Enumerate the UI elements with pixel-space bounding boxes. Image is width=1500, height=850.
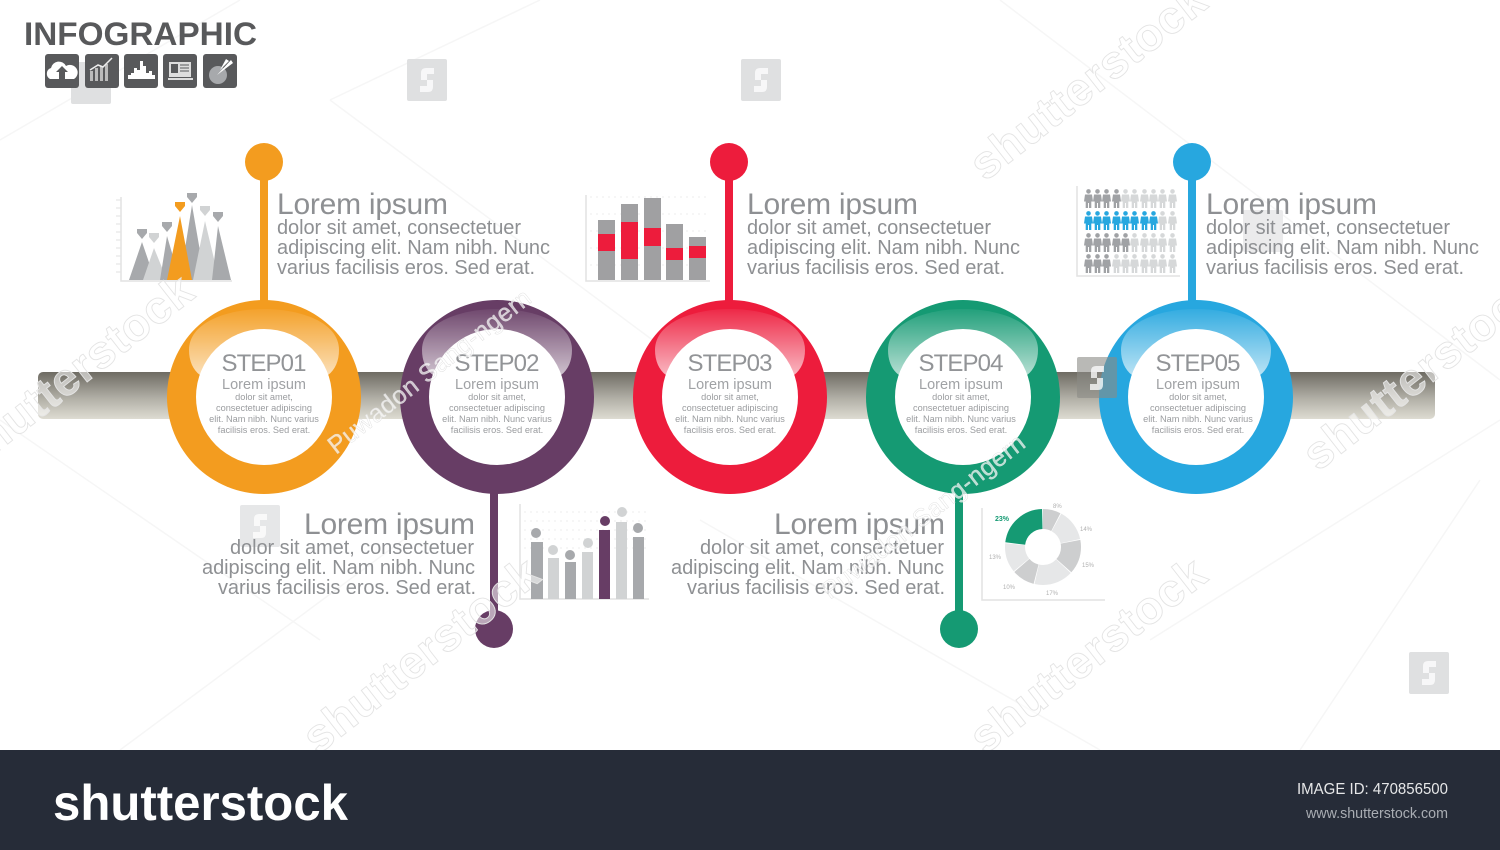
text block: step 5: varius facilisis eros. Sed erat. [1206,257,1464,279]
title: INFOGRAPHIC [24,16,257,52]
step 1 circle: STEP01 [222,350,306,377]
footer bar [0,750,1500,850]
text block: step 5: Lorem ipsum [1206,188,1377,221]
text block: step 2: Lorem ipsum [304,508,475,541]
step 5 pin [1173,143,1211,305]
text block: step 1: adipiscing elit. Nam nibh. Nunc [277,237,550,259]
step 4 circle: facilisis eros. Sed erat. [915,425,1007,435]
step 1 circle: dolor sit amet, [235,392,293,402]
chart: donut: 10% [1003,585,1016,591]
watermark text: Puwadon Sang-ngern [322,284,537,460]
step 1 circle: Lorem ipsum [222,377,306,393]
step 5 circle: elit. Nam nibh. Nunc varius [1143,414,1253,424]
watermark text: Puwadon Sang-ngern [816,429,1031,605]
timeline bar [38,372,1435,419]
text block: step 1: dolor sit amet, consectetuer [277,217,521,239]
chart: donut: 13% [989,555,1002,561]
text block: step 3: varius facilisis eros. Sed erat. [747,257,1005,279]
text block: step 3: adipiscing elit. Nam nibh. Nunc [747,237,1020,259]
step 3 circle: dolor sit amet, [701,392,759,402]
text block: step 5: adipiscing elit. Nam nibh. Nunc [1206,237,1479,259]
icon: equalizer bars [124,54,158,88]
step 1 pin [245,143,283,305]
text block: step 5: dolor sit amet, consectetuer [1206,217,1450,239]
chart: donut [982,504,1105,600]
step 4 circle [866,300,1060,494]
text block: step 4 [671,508,945,599]
step 3 circle: STEP03 [688,350,772,377]
icon: cloud upload [45,54,79,88]
step 3 circle [633,300,827,494]
watermark stamps [71,59,1449,694]
step 2 circle: Lorem ipsum [455,377,539,393]
text block: step 2: adipiscing elit. Nam nibh. Nunc [202,557,475,579]
step 4 circle: dolor sit amet, [932,392,990,402]
step 1 circle: consectetuer adipiscing [216,403,312,413]
step 5 circle: facilisis eros. Sed erat. [1152,425,1244,435]
chart: donut: 15% [1082,563,1095,569]
icon: target with darts [203,54,237,88]
step 1 circle: facilisis eros. Sed erat. [218,425,310,435]
step 3 circle: Lorem ipsum [688,377,772,393]
step 3 circle: elit. Nam nibh. Nunc varius [675,414,785,424]
text block: step 3: Lorem ipsum [747,188,918,221]
step 4 pin [940,488,978,648]
step 5 circle [1099,300,1293,494]
icon row [45,54,237,88]
step 5 circle: STEP05 [1156,350,1240,377]
step 3 circle: facilisis eros. Sed erat. [684,425,776,435]
text block: step 1: Lorem ipsum [277,188,448,221]
site url: www.shutterstock.com [1305,806,1448,822]
text block: step 2: dolor sit amet, consectetuer [230,537,474,559]
step 3 circle: consectetuer adipiscing [682,403,778,413]
text block: step 4: varius facilisis eros. Sed erat. [687,577,945,599]
image id: IMAGE ID: 470856500 [1297,781,1448,798]
step 4 circle: elit. Nam nibh. Nunc varius [906,414,1016,424]
footer logo: shutterstock [53,775,348,831]
step 1 circle [167,300,361,494]
chart: donut: 14% [1080,527,1093,533]
text block: step 3: dolor sit amet, consectetuer [747,217,991,239]
chart: donut: 23% [995,516,1010,523]
chart: triangles [116,193,232,281]
step 2 circle: elit. Nam nibh. Nunc varius [442,414,552,424]
step 1 circle: elit. Nam nibh. Nunc varius [209,414,319,424]
chart: purple column bars [520,504,649,599]
text block: step 5 [1206,188,1479,279]
text block: step 4: adipiscing elit. Nam nibh. Nunc [671,557,944,579]
icon: laptop [163,54,197,88]
step 5 circle: consectetuer adipiscing [1150,403,1246,413]
step 5 circle: Lorem ipsum [1156,377,1240,393]
text block: step 2 [202,508,476,599]
text block: step 1 [277,188,550,279]
text block: step 4: Lorem ipsum [774,508,945,541]
chart: stacked red bars [586,195,710,281]
watermark text: shutterstock [959,546,1216,763]
text block: step 3 [747,188,1020,279]
chart: donut: 8% [1053,504,1062,510]
text block: step 4: dolor sit amet, consectetuer [700,537,944,559]
text block: step 2: varius facilisis eros. Sed erat. [218,577,476,599]
chart: people pictogram [1077,186,1180,276]
step 5 circle: dolor sit amet, [1169,392,1227,402]
step 4 circle: consectetuer adipiscing [913,403,1009,413]
step 2 circle: consectetuer adipiscing [449,403,545,413]
step 3 pin [710,143,748,305]
watermark text: shutterstock [292,546,549,763]
chart: donut: 17% [1046,591,1059,597]
step 4 circle: STEP04 [918,350,1004,377]
step 2 circle [400,300,594,494]
step 2 circle: facilisis eros. Sed erat. [451,425,543,435]
step 2 circle: STEP02 [454,350,540,377]
text block: step 1: varius facilisis eros. Sed erat. [277,257,535,279]
step 4 circle: Lorem ipsum [919,377,1003,393]
step 2 pin [475,488,513,648]
step 2 circle: dolor sit amet, [468,392,526,402]
icon: growth chart [85,54,119,88]
